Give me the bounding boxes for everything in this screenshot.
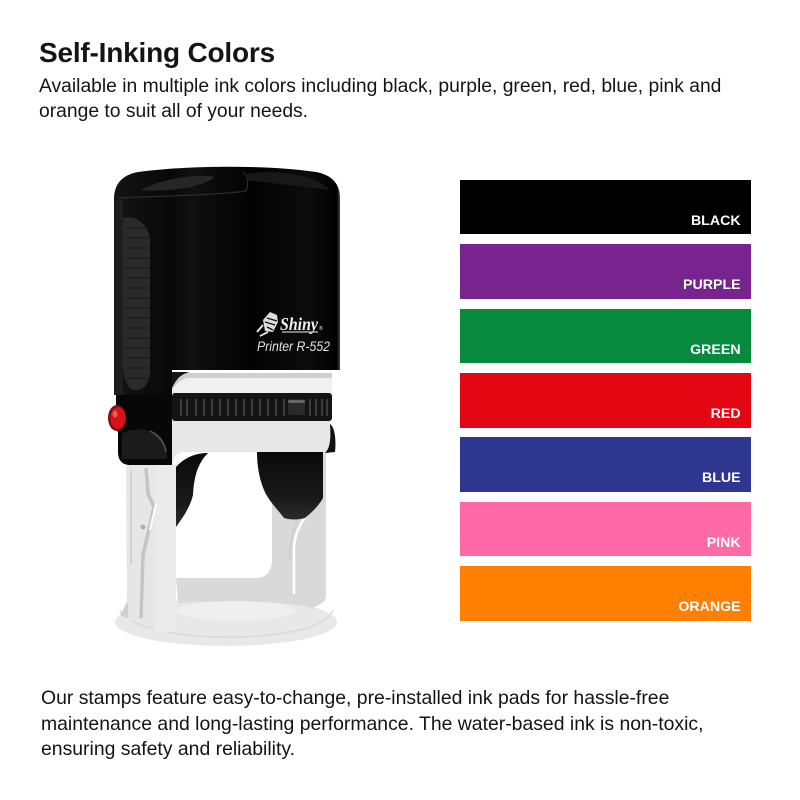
footer text: maintenance and long-lasting performance. The water-based ink is non-toxic, xyxy=(41,713,704,735)
swatch: red: RED xyxy=(711,406,741,422)
stamp rear wall and floor xyxy=(176,452,326,621)
footer text xyxy=(41,687,704,760)
stamp front leg xyxy=(120,465,176,632)
swatch: pink: PINK xyxy=(707,535,741,551)
stamp collar xyxy=(172,372,335,465)
swatch: green: GREEN xyxy=(690,342,741,358)
footer text: Our stamps feature easy-to-change, pre-installed ink pads for hassle-free xyxy=(41,687,669,709)
swatch: green xyxy=(460,308,751,363)
swatch: black: BLACK xyxy=(691,213,741,229)
brand logo xyxy=(257,312,323,336)
brand logo: ® xyxy=(319,325,323,332)
intro text: orange to suit all of your needs. xyxy=(39,101,308,122)
swatch: blue: BLUE xyxy=(702,470,741,486)
brand logo: Shiny xyxy=(280,314,319,334)
stamp black body xyxy=(114,167,340,465)
swatch: blue xyxy=(460,437,751,492)
swatch: orange xyxy=(460,566,751,620)
inner black mechanism xyxy=(176,452,323,527)
swatch: orange: ORANGE xyxy=(678,599,741,615)
intro text: Available in multiple ink colors including black, purple, green, red, blue, pink and xyxy=(39,76,721,97)
intro text xyxy=(39,76,721,122)
side grip xyxy=(123,217,150,390)
footer text: ensuring safety and reliability. xyxy=(41,738,295,760)
swatch: pink xyxy=(460,502,751,556)
swatch: purple: PURPLE xyxy=(683,277,741,293)
title: Self-Inking Colors xyxy=(39,37,275,68)
swatch: red xyxy=(460,373,751,428)
swatch: black xyxy=(460,180,751,234)
model label: Printer R-552 xyxy=(257,339,330,354)
swatch: purple xyxy=(460,244,751,298)
icon: red button xyxy=(108,405,126,431)
stamp base ring xyxy=(115,598,337,646)
